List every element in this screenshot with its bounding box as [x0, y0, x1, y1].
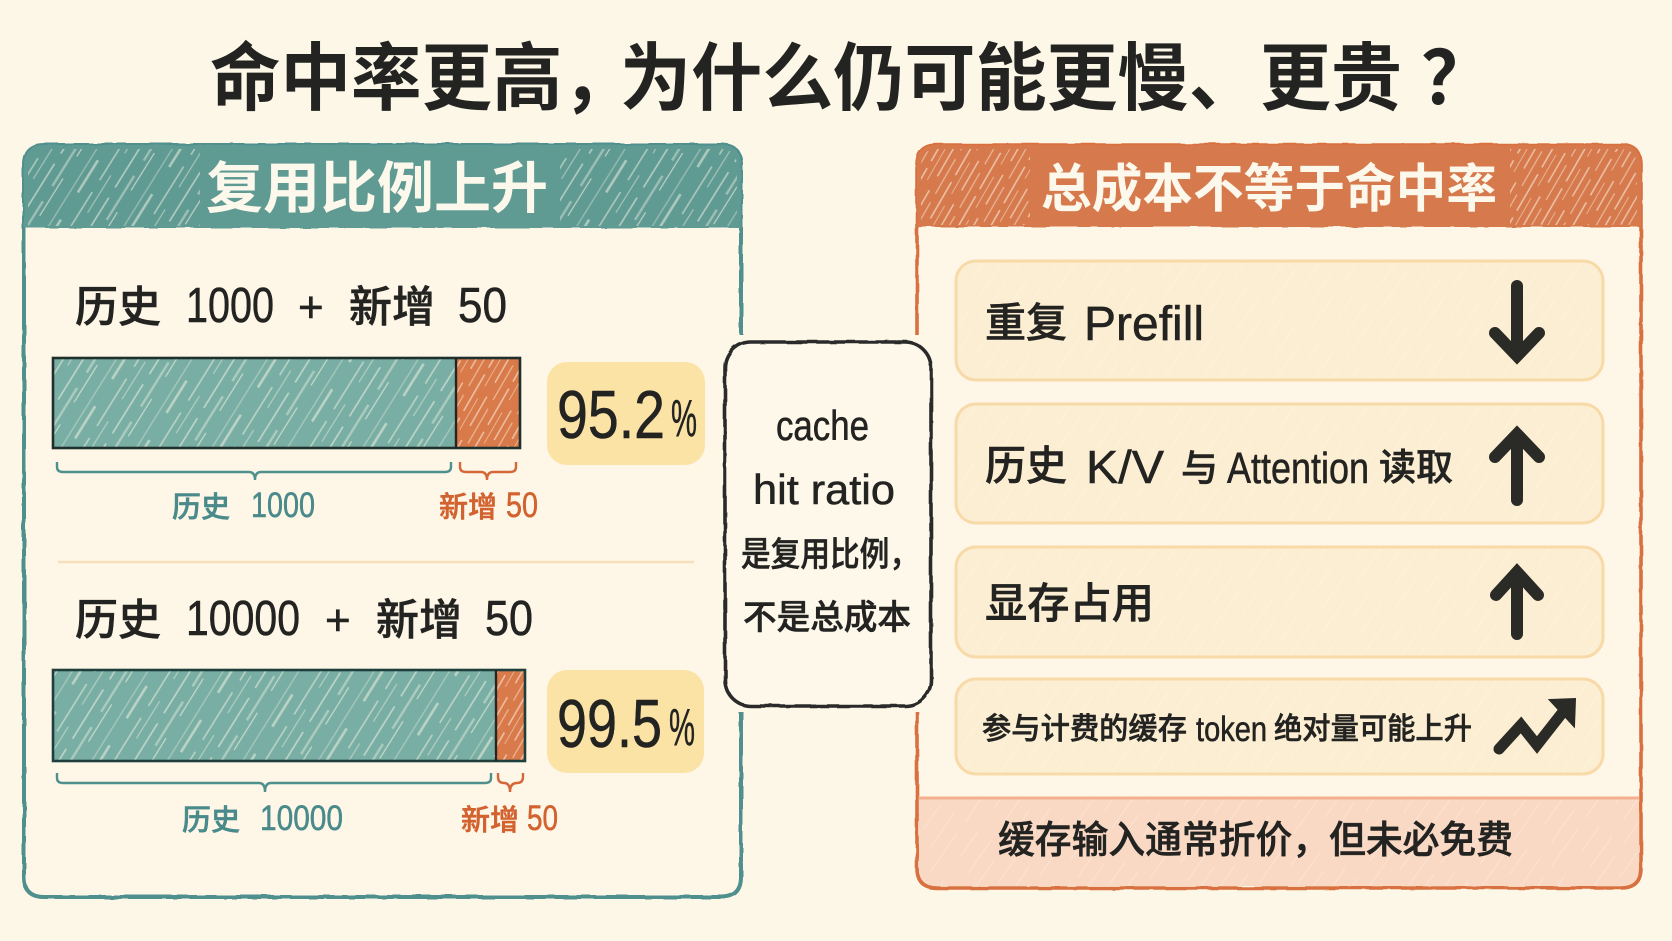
footer note band — [919, 798, 1639, 886]
title: 为什么仍可能更慢、更贵 — [620, 37, 1402, 120]
icon: down arrow — [1495, 286, 1539, 356]
stacked bar: 1000 + 50 — [53, 358, 520, 448]
brace: history 10000 — [57, 773, 491, 792]
row: repeated prefill, decreases: Prefill — [1084, 298, 1204, 351]
panel header band — [917, 145, 1641, 227]
row: repeated prefill, decreases — [956, 261, 1603, 380]
ratio badge: 99.5%: % — [669, 699, 695, 757]
row heading: history 1000: 历史 — [75, 284, 161, 332]
label: new 50: 新增 — [461, 804, 519, 837]
panel: total cost is not hit ratio — [917, 145, 1641, 888]
ratio badge: 95.2%: 95.2 — [557, 377, 665, 453]
row: history K/V and attention reads, increases: 与 — [1181, 448, 1218, 489]
ratio badge: 99.5%: 99.5 — [557, 686, 662, 762]
label: history 1000: 1000 — [251, 486, 315, 525]
panel frame — [917, 145, 1641, 888]
row: VRAM usage, increases — [956, 547, 1603, 657]
callout: cache hit ratio is reuse ratio, not total cost: cache — [776, 402, 869, 449]
label: history 1000: 历史 — [172, 491, 230, 524]
row: VRAM usage, increases: 显存占用 — [985, 580, 1154, 627]
panel: reuse ratio rises — [24, 145, 741, 897]
label: new 50: 新增 — [439, 491, 497, 524]
ratio badge: 95.2%: % — [671, 390, 697, 448]
ratio badge: 95.2% — [547, 362, 705, 465]
label: new 50: 50 — [506, 486, 538, 525]
brace: history 1000 — [57, 462, 451, 480]
label: history 10000: 10000 — [260, 799, 343, 838]
row: history K/V and attention reads, increases — [956, 404, 1603, 523]
row: billed cache tokens may rise: 参与计费的缓存 — [982, 713, 1187, 746]
icon: rising trend arrow — [1499, 699, 1575, 749]
stacked bar: 10000 + 50 — [53, 670, 525, 761]
title: 命中率更高， — [210, 37, 633, 120]
callout: cache hit ratio is reuse ratio, not total cost — [719, 335, 937, 712]
panel heading: 总成本不等于命中率 — [1041, 161, 1497, 219]
divider — [58, 561, 694, 563]
callout: cache hit ratio is reuse ratio, not total cost: 不是总成本 — [743, 599, 911, 637]
row heading: history 10000: + — [325, 596, 351, 645]
callout: cache hit ratio is reuse ratio, not total cost: hit ratio — [753, 466, 895, 513]
footer note band: 缓存输入通常折价，但未必免费 — [998, 820, 1513, 862]
panel header band — [24, 145, 741, 228]
row: billed cache tokens may rise — [956, 679, 1603, 774]
row heading: history 10000: 历史 — [75, 597, 161, 645]
label: history 10000: 历史 — [182, 804, 240, 837]
panel frame — [24, 145, 741, 897]
row heading: history 1000: + — [298, 283, 324, 332]
row heading: history 1000: 50 — [458, 279, 507, 333]
row: history K/V and attention reads, increases: K/V — [1086, 441, 1164, 493]
brace: new 50 — [460, 462, 516, 480]
row heading: history 1000: 新增 — [349, 284, 435, 332]
row heading: history 10000: 新增 — [376, 597, 462, 645]
panel heading: 复用比例上升 — [206, 157, 548, 220]
row heading: history 10000: 50 — [485, 592, 533, 646]
icon: up arrow — [1496, 572, 1538, 634]
label: new 50: 50 — [527, 799, 558, 838]
row: history K/V and attention reads, increases: Attention — [1227, 444, 1369, 493]
icon: up arrow — [1495, 434, 1539, 500]
callout: cache hit ratio is reuse ratio, not total cost: 是复用比例， — [741, 536, 919, 574]
row heading: history 1000: 1000 — [186, 279, 274, 333]
ratio badge: 99.5% — [547, 670, 704, 773]
row: history K/V and attention reads, increases: 历史 — [985, 443, 1067, 489]
row: repeated prefill, decreases: 重复 — [985, 300, 1067, 346]
row: history K/V and attention reads, increases: 读取 — [1379, 447, 1453, 488]
row heading: history 10000: 10000 — [186, 592, 300, 646]
row: billed cache tokens may rise: token — [1196, 710, 1267, 749]
title: ？ — [1421, 37, 1493, 120]
brace: new 50 — [498, 773, 523, 792]
row: billed cache tokens may rise: 绝对量可能上升 — [1274, 713, 1472, 746]
